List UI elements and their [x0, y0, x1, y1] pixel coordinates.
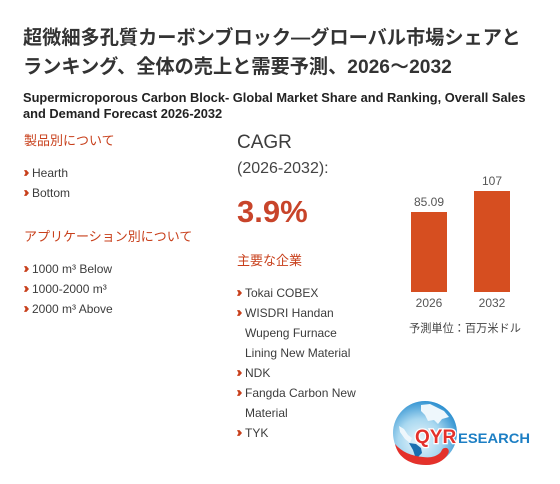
- list: companies: [237, 286, 356, 440]
- CAGR value: 3.9%: [237, 194, 308, 229]
- list: product types: Bottom: [32, 186, 70, 200]
- list: applications: 1000-2000 m³: [32, 282, 107, 296]
- list: companies: WISDRI Handan: [245, 306, 334, 320]
- heading: key companies: 主要な企業: [237, 253, 302, 268]
- bar: 2026: 85.09: [414, 195, 444, 209]
- list: companies: Lining New Material: [245, 346, 350, 360]
- chart unit note: 予測単位：百万米ドル: [409, 323, 521, 335]
- bar: 2026: 2026: [416, 296, 443, 310]
- CAGR label: CAGR: [237, 132, 292, 153]
- logo: QYResearch: [393, 401, 530, 465]
- list: applications: 2000 m³ Above: [32, 302, 113, 316]
- list: applications: [24, 262, 113, 316]
- swoosh: [395, 444, 449, 465]
- logo: QYResearch: ESEARCH: [458, 430, 530, 446]
- bar: 2032: [474, 174, 510, 310]
- list: applications: 1000 m³ Below: [32, 262, 112, 276]
- logo text: QYR: [415, 427, 456, 448]
- heading: by application: アプリケーション別について: [24, 229, 192, 244]
- list: companies: Wupeng Furnace: [245, 326, 337, 340]
- subtitle: Supermicroporous Carbon Block- Global Market Share and Ranking, Overall Sales and Demand Forecast 2026-2032: [23, 90, 525, 121]
- list: companies: TYK: [245, 426, 268, 440]
- bar: 2026: [411, 195, 447, 310]
- globe: [393, 401, 457, 465]
- CAGR period: (2026-2032):: [237, 160, 329, 177]
- heading: by product: 製品別について: [24, 133, 115, 148]
- title: 超微細多孔質カーボンブロック—グローバル市場シェアとランキング、全体の売上と需要予測、2026～2032: [23, 28, 521, 78]
- list: companies: Tokai COBEX: [245, 286, 318, 300]
- list: companies: Fangda Carbon New: [245, 386, 356, 400]
- bar: 2032: 2032: [479, 296, 506, 310]
- bar: 2032: 107: [482, 174, 502, 188]
- list: product types: Hearth: [32, 166, 68, 180]
- bar chart: [411, 174, 510, 310]
- list: companies: NDK: [245, 366, 270, 380]
- list: product types: [24, 166, 70, 200]
- list: companies: Material: [245, 406, 288, 420]
